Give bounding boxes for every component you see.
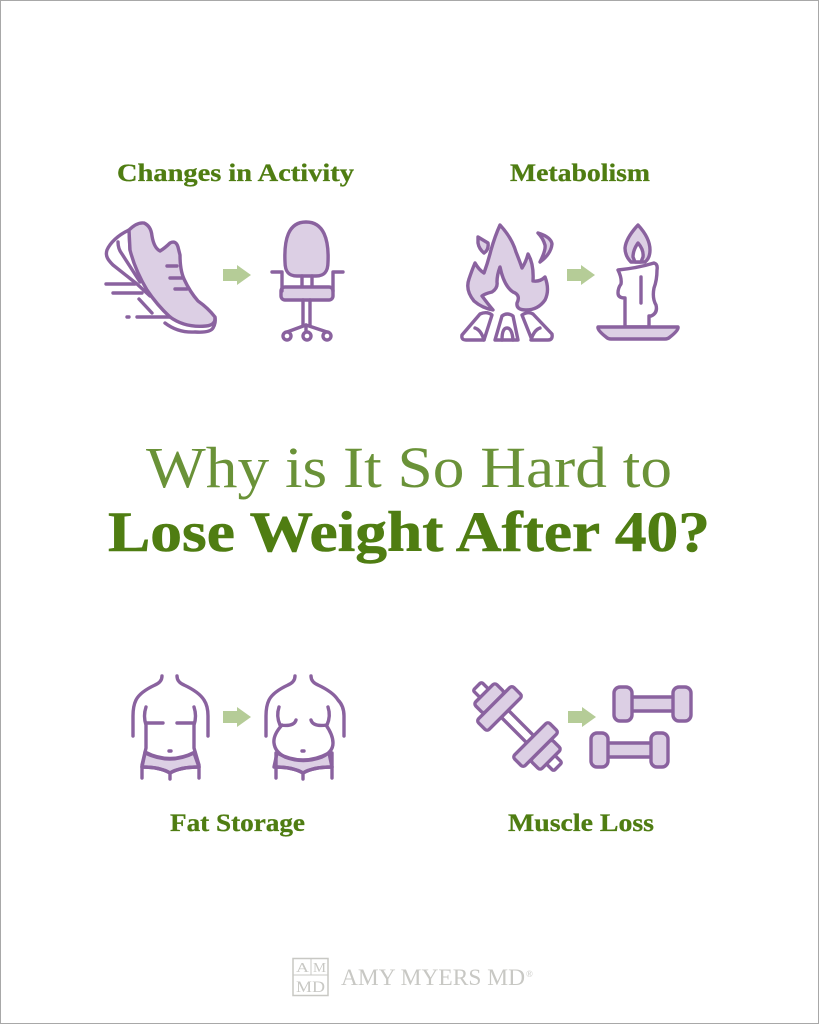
logo: Amy Myers MD: AMY MYERS MD: [341, 965, 525, 990]
icon: running shoe: [106, 223, 215, 332]
title: Lose Weight After 40?: [108, 501, 710, 564]
icon: small dumbbells: [591, 687, 691, 767]
icon: large dumbbell: [460, 669, 575, 784]
logo: Amy Myers MD: A: [296, 961, 310, 976]
icon: slim torso: [133, 676, 208, 779]
title: Why is It So Hard to: [146, 435, 672, 500]
icon: campfire: [462, 225, 552, 340]
logo: Amy Myers MD: [293, 958, 533, 996]
heading: Metabolism: Metabolism: [510, 160, 650, 187]
icon: office chair: [272, 222, 343, 340]
heading: Muscle Loss: Muscle Loss: [508, 810, 654, 837]
arrow: fat storage: [223, 707, 251, 727]
heading: Fat Storage: Fat Storage: [170, 810, 305, 837]
logo: Amy Myers MD: M: [313, 961, 327, 976]
arrow: muscle loss: [568, 707, 596, 727]
title: [108, 435, 710, 564]
icon: heavier torso: [266, 676, 344, 779]
arrow: activity: [223, 265, 251, 285]
logo: Amy Myers MD: ®: [526, 969, 533, 979]
heading: Changes in Activity: Changes in Activity: [117, 160, 355, 187]
icon: candle: [598, 225, 678, 339]
logo: Amy Myers MD: MD: [296, 979, 325, 996]
arrow: metabolism: [567, 265, 595, 285]
